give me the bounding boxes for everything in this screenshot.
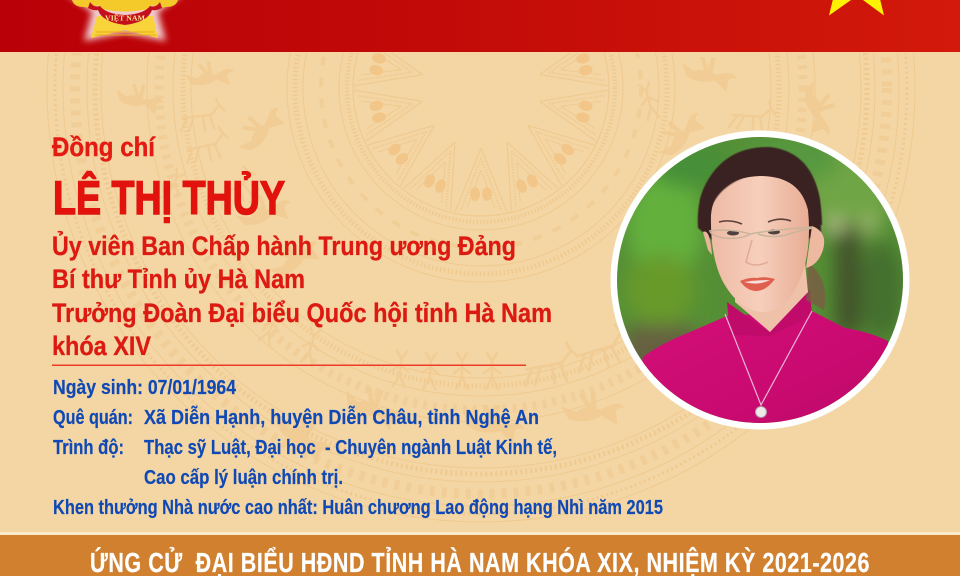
eyes and brows [719,219,791,236]
face [711,176,809,312]
neck [735,262,808,332]
hometown: Xã Diễn Hạnh, huyện Diễn Châu, tỉnh Nghệ An [144,405,539,429]
positions text block [52,231,552,361]
nose [746,240,768,265]
positions text block: khóa XIV [52,331,151,361]
hometown: Quê quán: [53,407,133,429]
footer band [0,532,960,576]
dress [642,289,888,423]
date of birth: Ngày sinh: 07/01/1964 [53,377,237,399]
drum bird and figure motifs [117,54,846,465]
hometown [53,405,539,429]
hair back [698,147,821,240]
positions text block: Bí thư Tỉnh ủy Hà Nam [52,264,305,294]
education: Thạc sỹ Luật, Đại học - Chuyên ngành Luật Kinh tế, [144,437,557,459]
emblem ribbon label: VIỆT NAM [105,14,145,22]
photo foliage background [610,130,910,430]
necklace [725,311,812,405]
biography text block [53,377,663,519]
heading: Đồng chí: Đồng chí [52,132,156,162]
portrait photo [610,130,910,440]
education: Cao cấp lý luận chính trị. [144,467,343,489]
national emblem [66,0,184,41]
positions text block: Ủy viên Ban Chấp hành Trung ương Đảng [52,231,516,261]
education [53,437,557,489]
drum star rays [354,53,608,212]
name: LÊ THỊ THỦY [53,171,285,224]
flag star [829,0,884,16]
ears [703,231,712,255]
positions text block: Trưởng Đoàn Đại biểu Quốc hội tỉnh Hà Nam [52,298,552,328]
glasses [709,227,813,238]
header band [0,0,960,52]
hair fringe [700,172,823,226]
pendant [756,406,766,418]
award: Khen thưởng Nhà nước cao nhất: Huân chương Lao động hạng Nhì năm 2015 [53,497,663,519]
lips [740,277,775,291]
education: Trình độ: [53,437,124,459]
